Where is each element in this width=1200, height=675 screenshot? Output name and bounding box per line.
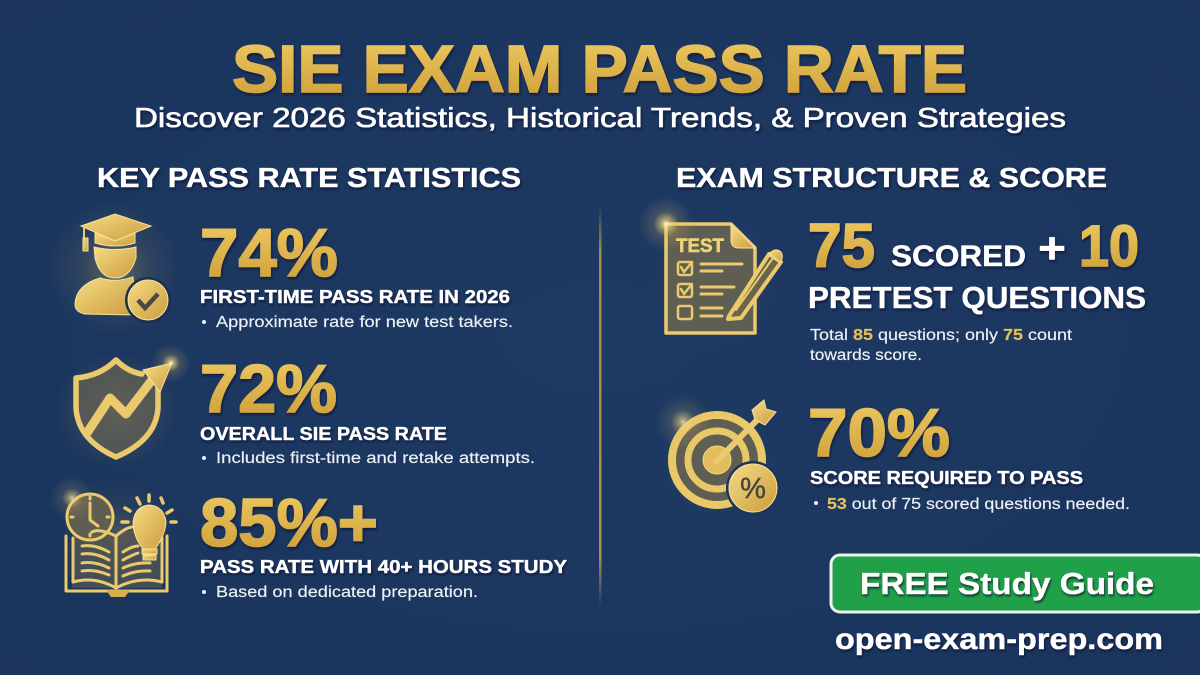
icon: test paper and pencil: TEST [676,236,724,257]
subtitle: Discover 2026 Statistics, Historical Trends, & Proven Strategies [134,102,1066,133]
stat: overall pass rate [200,351,535,467]
stat: pass rate with study: Based on dedicated preparation. [216,584,478,601]
stat: score required [808,395,1130,513]
stat: first-time pass rate: FIRST-TIME PASS RATE IN 2026 [200,286,510,307]
icon: clock, book and light bulb [50,476,178,597]
stat: first-time pass rate: 74% [200,215,338,291]
stat: score required: 53 out of 75 scored questions needed. [827,496,1130,513]
text: total questions note: Total 85 questions; only 75 count [810,327,1073,344]
stat: pass rate with study [200,485,568,601]
stat: score required: 70% [808,395,950,471]
stat: pass rate with study: 85%+ [200,485,378,561]
stat: first-time pass rate: Approximate rate for new test takers. [216,314,513,331]
icon: target with percent badge [655,394,780,523]
stat: scored plus pretest: 10 [1079,214,1139,279]
button: free study guide [831,555,1200,612]
stat: scored plus pretest: 75 [808,212,875,281]
title: SIE EXAM PASS RATE [232,32,967,107]
stat: scored plus pretest [808,212,1146,315]
stat: overall pass rate: Includes first-time and retake attempts. [216,450,535,467]
website url: open-exam-prep.com [835,623,1163,656]
button: free study guide: FREE Study Guide [860,566,1154,601]
text: total questions note: towards score. [810,347,922,364]
stat: score required: SCORE REQUIRED TO PASS [810,467,1083,488]
icon: target with percent badge: % [740,473,766,505]
stat: pass rate with study: PASS RATE WITH 40+ HOURS STUDY [200,556,568,577]
stat: overall pass rate: 72% [200,351,337,427]
stat: first-time pass rate [200,215,513,331]
panel: exam structure and score [638,162,1200,656]
heading: exam structure and score: EXAM STRUCTURE & SCORE [676,162,1107,193]
icon: test paper and pencil [638,196,782,348]
stat: scored plus pretest: SCORED [891,240,1026,273]
heading: key pass rate statistics: KEY PASS RATE STATISTICS [97,162,521,193]
icon: shield with rising arrow [55,343,191,468]
stat: scored plus pretest: PRETEST QUESTIONS [808,280,1146,315]
divider [599,205,602,607]
stat: scored plus pretest: + [1038,224,1066,273]
icon: graduate with check [47,200,183,336]
stat: overall pass rate: OVERALL SIE PASS RATE [200,423,447,444]
text: total questions note [810,327,1073,364]
panel: key pass rate statistics [47,162,568,601]
